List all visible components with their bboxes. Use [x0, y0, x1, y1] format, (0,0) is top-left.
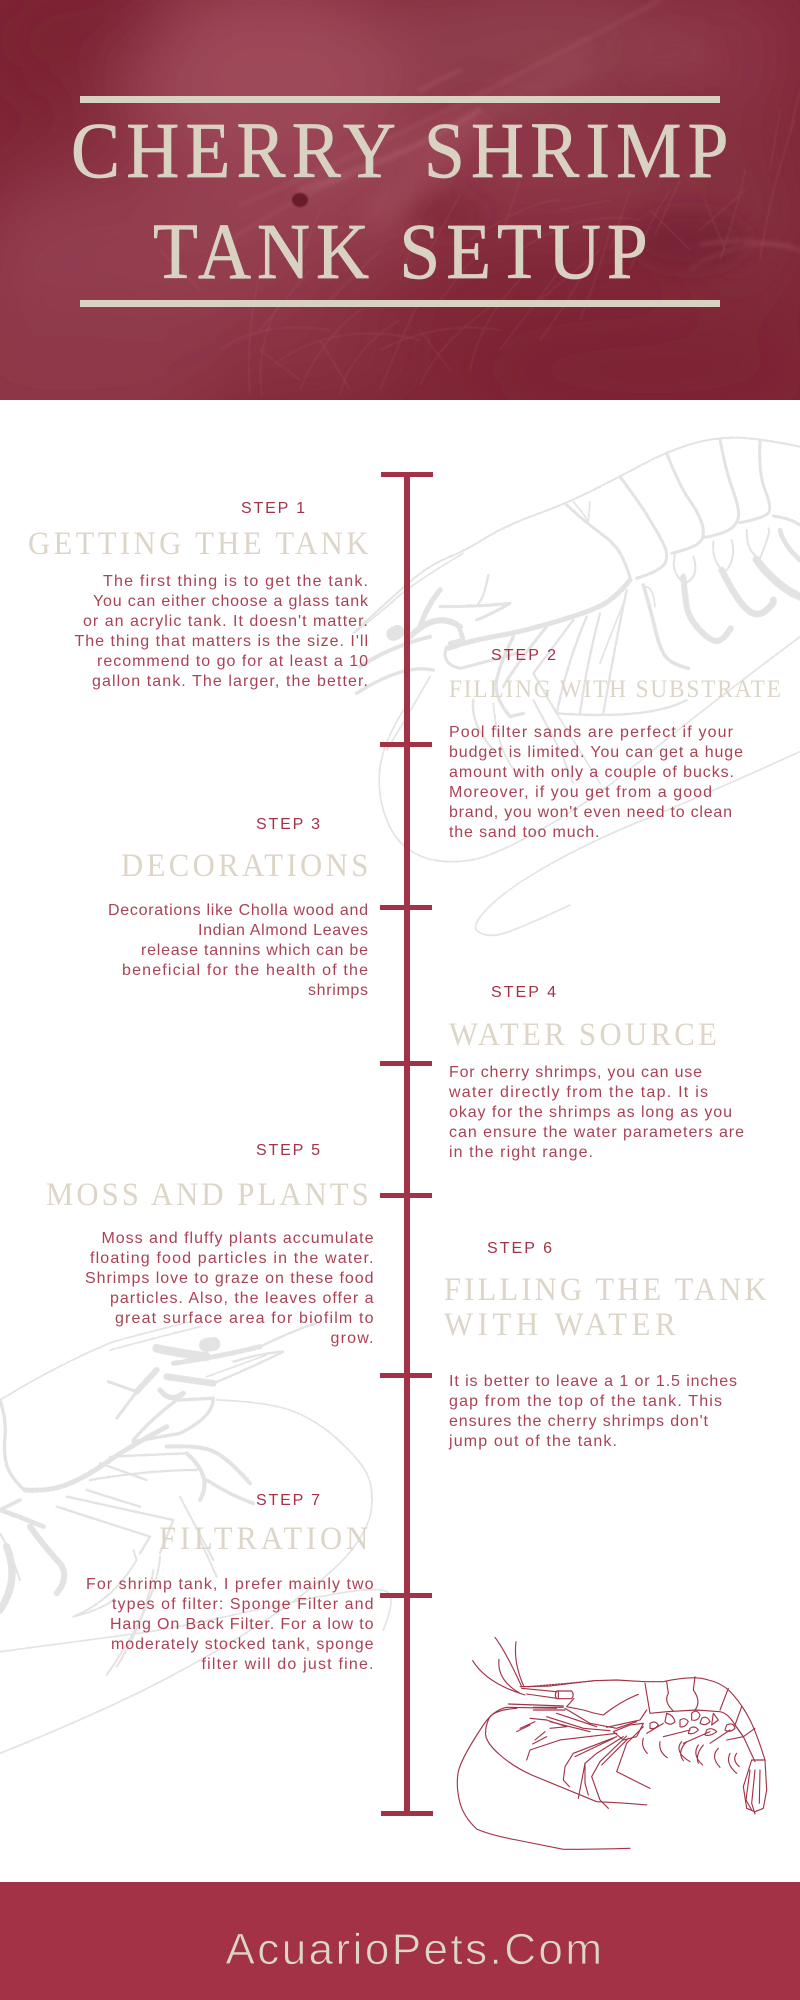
step 1	[28, 500, 369, 690]
step 6 text: It is better to leave a 1 or 1.5 inches	[449, 1373, 737, 1390]
step 3 text	[108, 902, 368, 999]
step 1 label: STEP 1	[241, 500, 305, 517]
watermark shrimp top right	[353, 438, 800, 935]
step 7 heading: FILTRATION	[159, 1520, 368, 1556]
dark eye spot	[292, 193, 308, 207]
step 6 text: gap from the top of the tank. This	[449, 1393, 722, 1410]
step 1 heading: GETTING THE TANK	[28, 525, 368, 561]
step 2 text: amount with only a couple of bucks.	[449, 764, 734, 781]
step 1 text: recommend to go for at least a 10	[97, 653, 368, 670]
step 2	[449, 647, 781, 841]
step 7 text: filter will do just fine.	[202, 1656, 374, 1673]
step 5 text: Shrimps love to graze on these food	[85, 1270, 374, 1287]
title: TANK SETUP	[153, 208, 648, 296]
step 1 text: The first thing is to get the tank.	[103, 573, 368, 590]
step 1 text: or an acrylic tank. It doesn't matter.	[83, 613, 368, 630]
step 5 heading: MOSS AND PLANTS	[46, 1176, 369, 1212]
step 4 heading: WATER SOURCE	[449, 1016, 717, 1052]
step 3	[108, 816, 368, 999]
step 2 text: budget is limited. You can get a huge	[449, 744, 743, 761]
step 4 text: okay for the shrimps as long as you	[449, 1104, 732, 1121]
step 4	[448, 984, 744, 1161]
step 7 text: Hang On Back Filter. For a low to	[110, 1616, 374, 1633]
step 1 text: You can either choose a glass tank	[93, 593, 369, 610]
footer website text: AcuarioPets.Com	[226, 1925, 602, 1974]
step 6	[444, 1240, 767, 1450]
step 5 text: Moss and fluffy plants accumulate	[102, 1230, 374, 1247]
footer	[0, 1882, 800, 2000]
step 7 text: For shrimp tank, I prefer mainly two	[86, 1576, 374, 1593]
step 5 text: great surface area for biofilm to	[115, 1310, 374, 1327]
step 5 label: STEP 5	[256, 1142, 320, 1159]
step 3 text: shrimps	[308, 982, 368, 999]
step 4 text: can ensure the water parameters are	[449, 1124, 744, 1141]
step 3 heading: DECORATIONS	[121, 847, 368, 883]
step 6 text: ensures the cherry shrimps don't	[449, 1413, 709, 1430]
step 2 text	[449, 724, 743, 841]
step 6 heading: FILLING THE TANK	[444, 1271, 767, 1307]
title: CHERRY SHRIMP	[71, 107, 729, 195]
step 3 text: release tannins which can be	[141, 942, 368, 959]
watermark shrimp bottom left	[0, 1322, 391, 1753]
header banner	[0, 0, 800, 400]
step 2 text: Moreover, if you get from a good	[449, 784, 712, 801]
step 7 label: STEP 7	[256, 1492, 320, 1509]
title	[74, 124, 726, 280]
title top rule	[80, 96, 720, 103]
step 4 text	[448, 1064, 744, 1161]
step 2 text: brand, you won't even need to clean	[449, 804, 732, 821]
step 6 text: jump out of the tank.	[448, 1433, 617, 1450]
timeline	[380, 472, 433, 1816]
step 5 text: grow.	[330, 1330, 374, 1347]
header photo background	[0, 0, 800, 400]
step 1 text: gallon tank. The larger, the better.	[92, 673, 368, 690]
footer bar	[0, 1882, 800, 2000]
step 3 text: beneficial for the health of the	[122, 962, 368, 979]
step 4 text: in the right range.	[449, 1144, 593, 1161]
step 5	[46, 1142, 374, 1347]
step 2 heading: FILLING WITH SUBSTRATE	[449, 675, 781, 703]
step 3 label: STEP 3	[256, 816, 320, 833]
step 5 text: particles. Also, the leaves offer a	[110, 1290, 374, 1307]
step 5 text: floating food particles in the water.	[90, 1250, 374, 1267]
step 7 text: types of filter: Sponge Filter and	[112, 1596, 374, 1613]
step 4 label: STEP 4	[491, 984, 556, 1001]
step 4 text: water directly from the tap. It is	[448, 1084, 708, 1101]
step 2 label: STEP 2	[491, 647, 556, 664]
step 1 text	[74, 573, 369, 690]
step 6 heading	[444, 1271, 767, 1342]
step 3 text: Indian Almond Leaves	[198, 922, 368, 939]
step 1 text: The thing that matters is the size. I'll	[74, 633, 368, 650]
step 5 text	[85, 1230, 374, 1347]
step 6 text	[448, 1373, 737, 1450]
step 2 text: Pool filter sands are perfect if your	[449, 724, 734, 741]
step 2 text: the sand too much.	[449, 824, 600, 841]
step 7 text	[86, 1576, 374, 1673]
title bottom rule	[80, 300, 720, 307]
step 7	[86, 1492, 374, 1673]
icon: red shrimp drawing	[457, 1637, 767, 1849]
step 6 label: STEP 6	[487, 1240, 552, 1257]
step 6 heading: WITH WATER	[444, 1306, 676, 1342]
step 4 text: For cherry shrimps, you can use	[449, 1064, 702, 1081]
step 3 text: Decorations like Cholla wood and	[108, 902, 368, 919]
step 7 text: moderately stocked tank, sponge	[111, 1636, 374, 1653]
